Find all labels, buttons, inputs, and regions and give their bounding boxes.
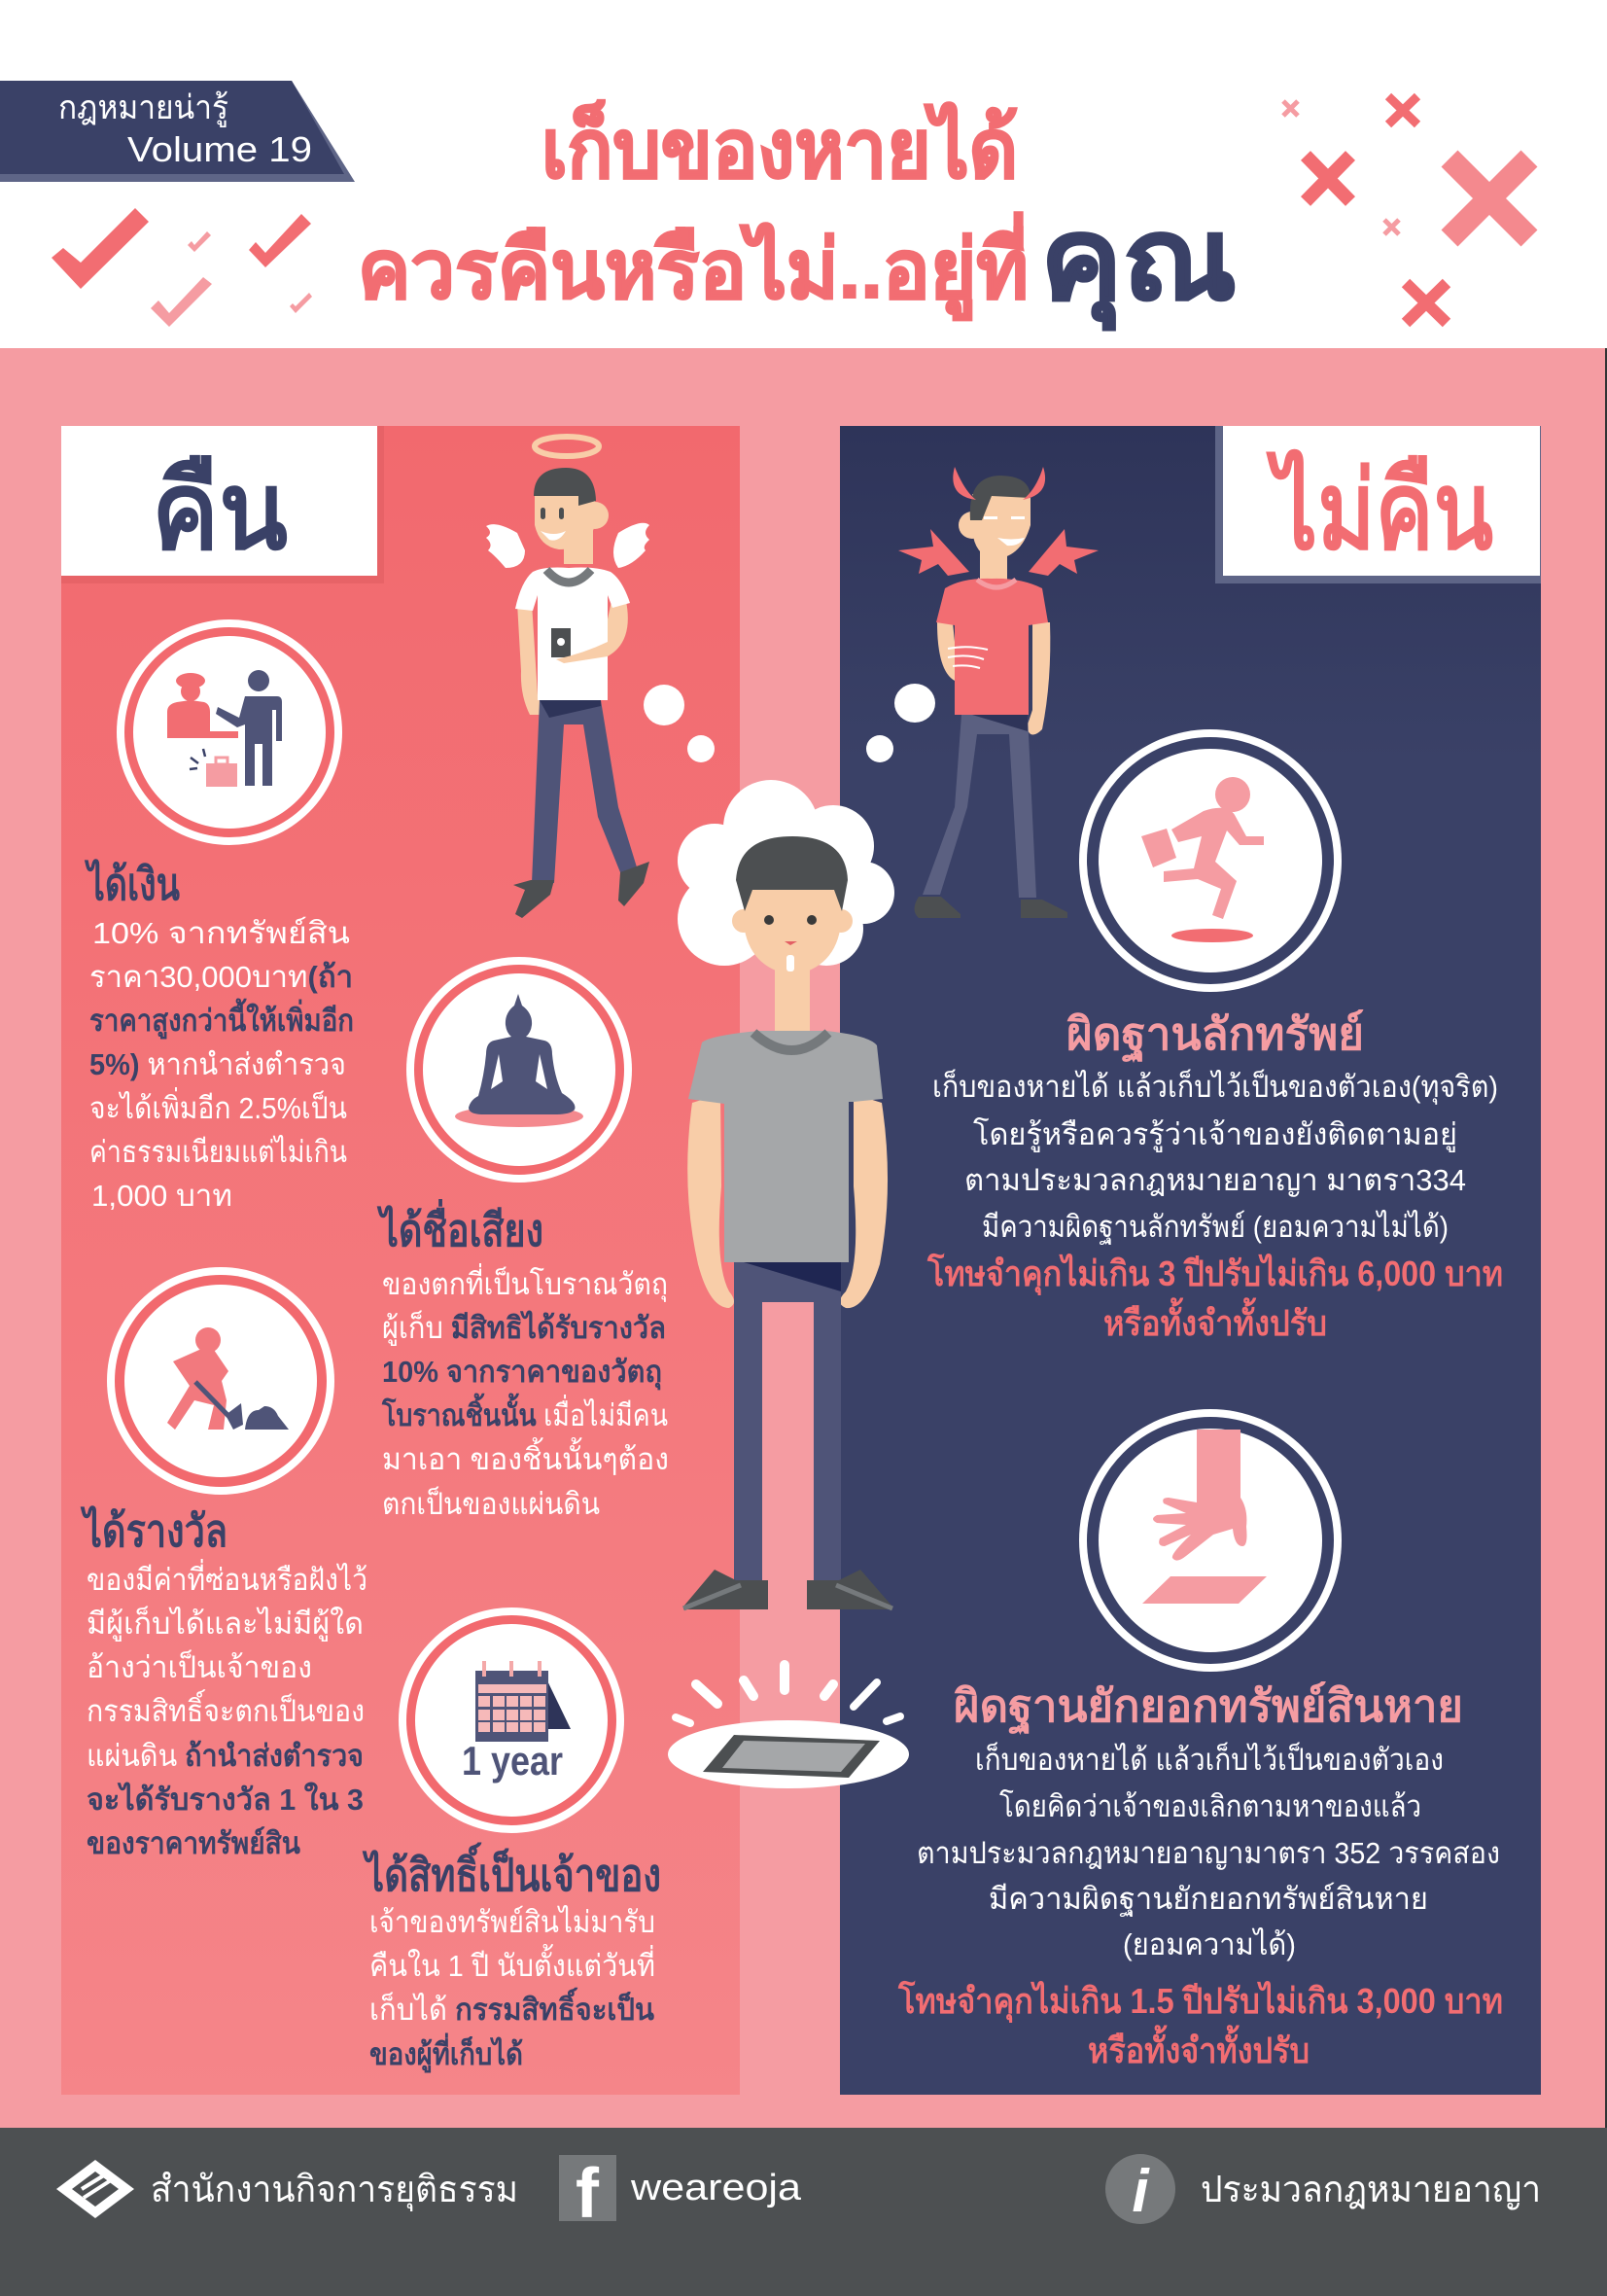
text block: ได้รางวัล: จะได้รับรางวัล 1 ใน 3 [87,1782,364,1817]
header badge: Volume 19: Volume 19 [127,129,312,169]
x marks [1283,96,1529,323]
text block: ได้ชื่อเสียง: โบราณชิ้นนั้น เมื่อไม่มีคน [381,1393,668,1432]
text block: ได้เงิน: 5%) หากนำส่งตำรวจ [89,1047,346,1081]
text block: ได้รางวัล: กรรมสิทธิ์จะตกเป็นของ [87,1688,365,1728]
thought bubbles: angel [644,685,715,762]
icon: calendar 1 year [399,1607,624,1833]
text block: ผิดฐานยักยอกทรัพย์สินหาย: มีความผิดฐานยักยอกทรัพย์สินหาย [989,1882,1428,1917]
heading box: ไม่คืน: ไม่คืน [1266,449,1493,572]
icon: digging for treasure [107,1267,334,1495]
text block: ได้รางวัล: มีผู้เก็บได้และไม่มีผู้ใด [87,1606,364,1642]
text block: ได้เงิน: จะได้เพิ่มอีก 2.5%เป็น [89,1087,347,1125]
text block: ผิดฐานลักทรัพย์ [926,1008,1503,1343]
text block: ผิดฐานลักทรัพย์: โทษจำคุกไม่เกิน 3 ปีปรับไม่เกิน 6,000 บาท [926,1253,1503,1296]
text block: ได้รางวัล: ของราคาทรัพย์สิน [87,1826,300,1860]
text block: ผิดฐานยักยอกทรัพย์สินหาย: โดยคิดว่าเจ้าของเลิกตามหาของแล้ว [999,1789,1421,1823]
text block: ได้สิทธิ์เป็นเจ้าของ: เจ้าของทรัพย์สินไม่มารับ [369,1905,655,1939]
header badge: Volume 19: กฎหมายน่ารู้ [58,89,228,127]
check marks [52,208,312,327]
text block: ได้รางวัล: ได้รางวัล [80,1505,227,1556]
icon: hand picking up item [1079,1409,1342,1672]
icon: facebook: f [576,2155,600,2233]
text block: ได้รางวัล: ของมีค่าที่ซ่อนหรือฝังไว้ [87,1559,367,1597]
icon: Buddha statue [406,957,632,1183]
text block: ผิดฐานลักทรัพย์: โดยรู้หรือควรรู้ว่าเจ้าของยังติดตามอยู่ [973,1117,1457,1152]
figure: angel man [486,437,649,918]
text block: ได้รางวัล [80,1505,367,1860]
icon: facebook [559,2155,616,2233]
footer bar: สำนักงานกิจการยุติธรรม [151,2170,518,2211]
text block: ได้รางวัล: แผ่นดิน ถ้านำส่งตำรวจ [87,1739,364,1773]
text block: ได้รางวัล: อ้างว่าเป็นเจ้าของ [87,1649,312,1684]
header badge: Volume 19 [0,81,355,182]
text block: ผิดฐานยักยอกทรัพย์สินหาย: (ยอมความได้) [1123,1927,1296,1961]
footer bar: weareoja [630,2168,802,2208]
title: คุณ [1040,195,1237,331]
text block: ได้เงิน: 1,000 บาท [91,1179,232,1213]
text block: ผิดฐานลักทรัพย์: เก็บของหายได้ แล้วเก็บไว้เป็นของตัวเอง(ทุจริต) [932,1069,1498,1106]
heading box: ไม่คืน [1215,426,1541,583]
thought bubbles: devil [866,684,935,762]
panel: ไม่คืน (do not return) [840,426,1541,2095]
text block: ผิดฐานยักยอกทรัพย์สินหาย: ตามประมวลกฎหมายอาญามาตรา 352 วรรคสอง [917,1836,1500,1870]
figure: centre man with thought cloud [678,780,894,1609]
footer bar: ประมวลกฎหมายอาญา [1201,2170,1541,2210]
icon: thief running [1079,729,1342,992]
text block: ได้เงิน: ค่าธรรมเนียมแต่ไม่เกิน [89,1135,347,1169]
text block: ผิดฐานลักทรัพย์: ตามประมวลกฎหมายอาญา มาตรา334 [964,1163,1466,1197]
text block: ได้ชื่อเสียง: ของตกที่เป็นโบราณวัตถุ [382,1263,668,1303]
text block: ได้ชื่อเสียง: ผู้เก็บ มีสิทธิได้รับรางวัล [382,1310,666,1346]
text block: ได้ชื่อเสียง: มาเอา ของชิ้นนั้นๆต้อง [382,1437,669,1476]
text block: ผิดฐานยักยอกทรัพย์สินหาย: เก็บของหายได้ แล้วเก็บไว้เป็นของตัวเอง [975,1742,1444,1777]
heading box: คืน: คืน [152,450,288,572]
text block: ผิดฐานยักยอกทรัพย์สินหาย [897,1680,1503,2070]
text block: ได้สิทธิ์เป็นเจ้าของ: ของผู้ที่เก็บได้ [369,2032,523,2073]
thought cloud [678,780,894,966]
text block: ผิดฐานยักยอกทรัพย์สินหาย: ผิดฐานยักยอกทรัพย์สินหาย [954,1680,1463,1735]
text block: ได้เงิน [84,859,354,1213]
icon: calendar 1 year: 1 year [462,1738,563,1784]
icon: info: i [1132,2158,1150,2225]
text block: ผิดฐานลักทรัพย์: ผิดฐานลักทรัพย์ [1066,1008,1364,1063]
text block: ผิดฐานยักยอกทรัพย์สินหาย: โทษจำคุกไม่เกิน 1.5 ปีปรับไม่เกิน 3,000 บาท [897,1980,1503,2024]
text block: ได้ชื่อเสียง: ตกเป็นของแผ่นดิน [382,1486,600,1521]
title: เก็บของหายได้ [541,99,1018,194]
main pink background [0,348,1607,2128]
title: ควรคืนหรือไม่..อยู่ที่ [358,212,1029,321]
footer bar [0,2128,1607,2296]
text block: ได้เงิน: ราคา30,000บาท(ถ้า [89,960,353,994]
text block: ได้สิทธิ์เป็นเจ้าของ: คืนใน 1 ปี นับตั้งแต่วันที่ [369,1944,655,1983]
text block: ได้เงิน: 10% จากทรัพย์สิน [92,916,350,950]
title [358,99,1237,331]
text block: ผิดฐานลักทรัพย์: มีความผิดฐานลักทรัพย์ (ยอมความไม่ได้) [982,1210,1449,1245]
panel: คืน (return) [61,426,740,2095]
text block: ได้ชื่อเสียง [376,1199,669,1521]
logo: justice office [56,2160,134,2218]
icon: info [1105,2154,1175,2225]
text block: ได้ชื่อเสียง: 10% จากราคาของวัตถุ [382,1355,662,1391]
text block: ได้สิทธิ์เป็นเจ้าของ [362,1842,661,2073]
heading box: คืน [61,426,384,583]
text block: ได้ชื่อเสียง: ได้ชื่อเสียง [376,1199,543,1255]
text block: ได้สิทธิ์เป็นเจ้าของ: ได้สิทธิ์เป็นเจ้าของ [362,1842,661,1900]
text block: ได้เงิน: ราคาสูงกว่านี้ให้เพิ่มอีก [89,998,354,1040]
figure: devil man [898,467,1099,918]
text block: ผิดฐานยักยอกทรัพย์สินหาย: หรือทั้งจำทั้งปรับ [1088,2025,1310,2070]
text block: ได้สิทธิ์เป็นเจ้าของ: เก็บได้ กรรมสิทธิ์จะเป็น [369,1987,654,2027]
icon: lost tablet on floor [668,1665,909,1788]
icon: officer and lost property [117,619,342,845]
text block: ผิดฐานลักทรัพย์: หรือทั้งจำทั้งปรับ [1103,1297,1327,1343]
text block: ได้เงิน: ได้เงิน [84,859,180,909]
